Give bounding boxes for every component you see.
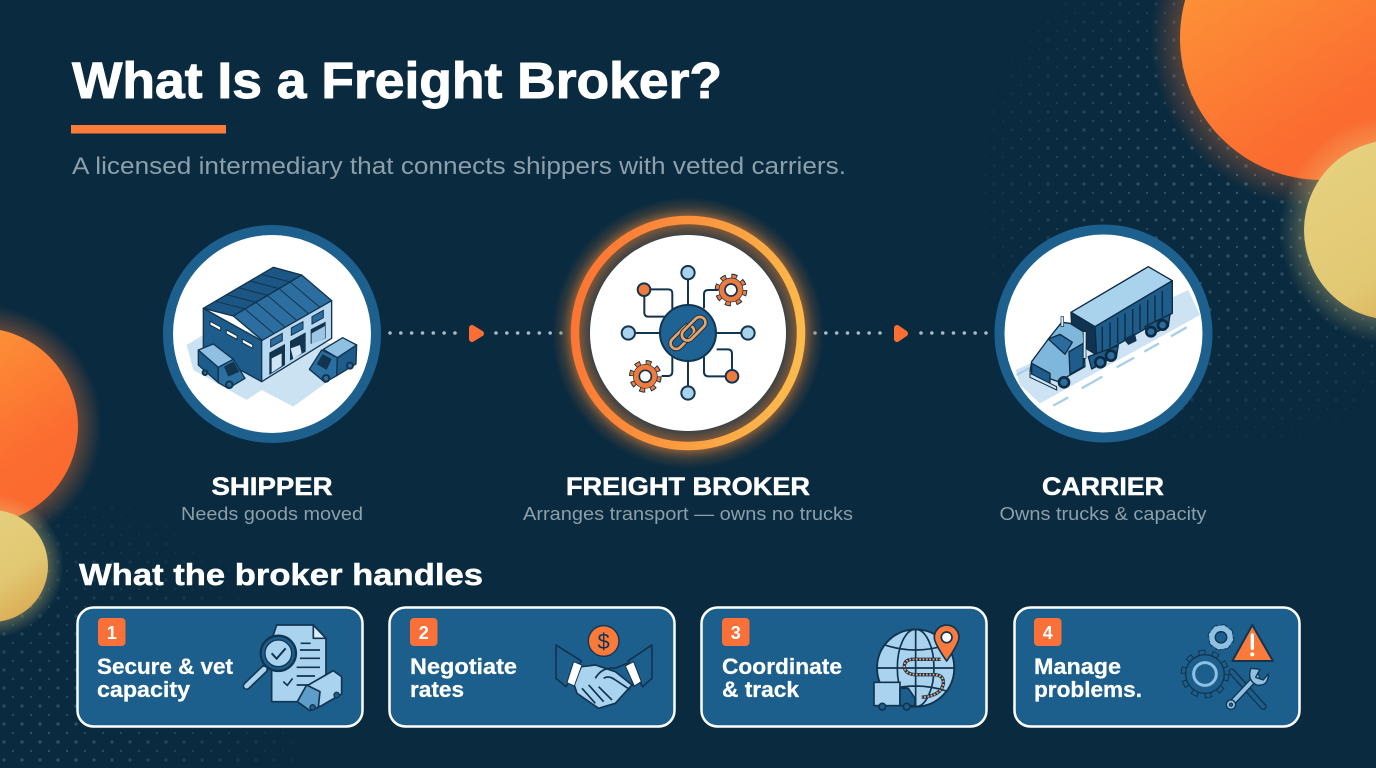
subtitle: A licensed intermediary that connects shippers with vetted carriers. bbox=[72, 153, 846, 180]
label: carrier: Owns trucks & capacity bbox=[1000, 504, 1206, 524]
panel: shipper bbox=[168, 230, 376, 438]
label: freight broker: FREIGHT BROKER bbox=[566, 473, 810, 501]
label: freight broker bbox=[523, 473, 853, 524]
decorative orange circle left bbox=[0, 304, 102, 548]
badge 2: 2 bbox=[419, 623, 429, 643]
badge 3: 3 bbox=[731, 623, 741, 643]
icon: document, magnifier, truck bbox=[247, 625, 342, 711]
decorative yellow circle right bbox=[1279, 115, 1376, 345]
panel: carrier bbox=[1000, 230, 1208, 438]
badge 3 bbox=[722, 618, 750, 646]
text: manage problems: problems. bbox=[1034, 677, 1142, 702]
badge 4: 4 bbox=[1043, 623, 1053, 643]
label: shipper: SHIPPER bbox=[212, 473, 332, 501]
label: carrier bbox=[1000, 473, 1206, 524]
arrow: shipper to broker bbox=[390, 328, 561, 339]
icon: network with chain link bbox=[622, 266, 755, 400]
section heading: What the broker handles bbox=[79, 557, 483, 592]
text: manage problems bbox=[1034, 654, 1142, 702]
icon: handshake with dollar coin: $ bbox=[598, 629, 610, 654]
arrow: broker to carrier bbox=[815, 328, 986, 339]
label: shipper bbox=[181, 473, 363, 524]
text: coordinate and track: & track bbox=[722, 677, 800, 702]
title underline bbox=[71, 125, 226, 134]
icon: gears, warning triangle, wrench bbox=[1184, 625, 1273, 709]
text: secure and vet capacity: capacity bbox=[97, 677, 191, 702]
badge 4 bbox=[1034, 618, 1062, 646]
icon: globe, route, pin, truck bbox=[874, 625, 959, 710]
label: shipper: Needs goods moved bbox=[181, 504, 363, 524]
decorative yellow circle left bbox=[0, 494, 64, 638]
card 4: manage problems bbox=[1014, 608, 1300, 726]
panel: freight broker bbox=[552, 197, 824, 469]
decorative orange circle top right bbox=[1150, 0, 1376, 210]
text: secure and vet capacity: Secure & vet bbox=[97, 654, 234, 679]
card 1: secure and vet capacity bbox=[78, 608, 362, 726]
badge 1: 1 bbox=[107, 623, 117, 643]
text: negotiate rates bbox=[410, 654, 517, 702]
text: secure and vet capacity bbox=[97, 654, 234, 702]
icon: warehouse with trucks bbox=[187, 267, 357, 407]
icon: handshake with dollar coin bbox=[556, 626, 652, 708]
label: carrier: CARRIER bbox=[1042, 473, 1164, 501]
text: negotiate rates: Negotiate bbox=[410, 654, 517, 679]
text: coordinate and track: Coordinate bbox=[722, 654, 842, 679]
text: coordinate and track bbox=[722, 654, 842, 702]
badge 1 bbox=[98, 618, 126, 646]
card 3: coordinate and track bbox=[702, 608, 986, 726]
text: negotiate rates: rates bbox=[410, 677, 464, 702]
title: What Is a Freight Broker? bbox=[72, 52, 722, 109]
label: freight broker: Arranges transport — owns no trucks bbox=[523, 504, 853, 524]
icon: semi truck on road bbox=[1016, 267, 1200, 406]
card 2: negotiate rates bbox=[390, 608, 674, 726]
badge 2 bbox=[410, 618, 438, 646]
text: manage problems: Manage bbox=[1034, 654, 1121, 679]
